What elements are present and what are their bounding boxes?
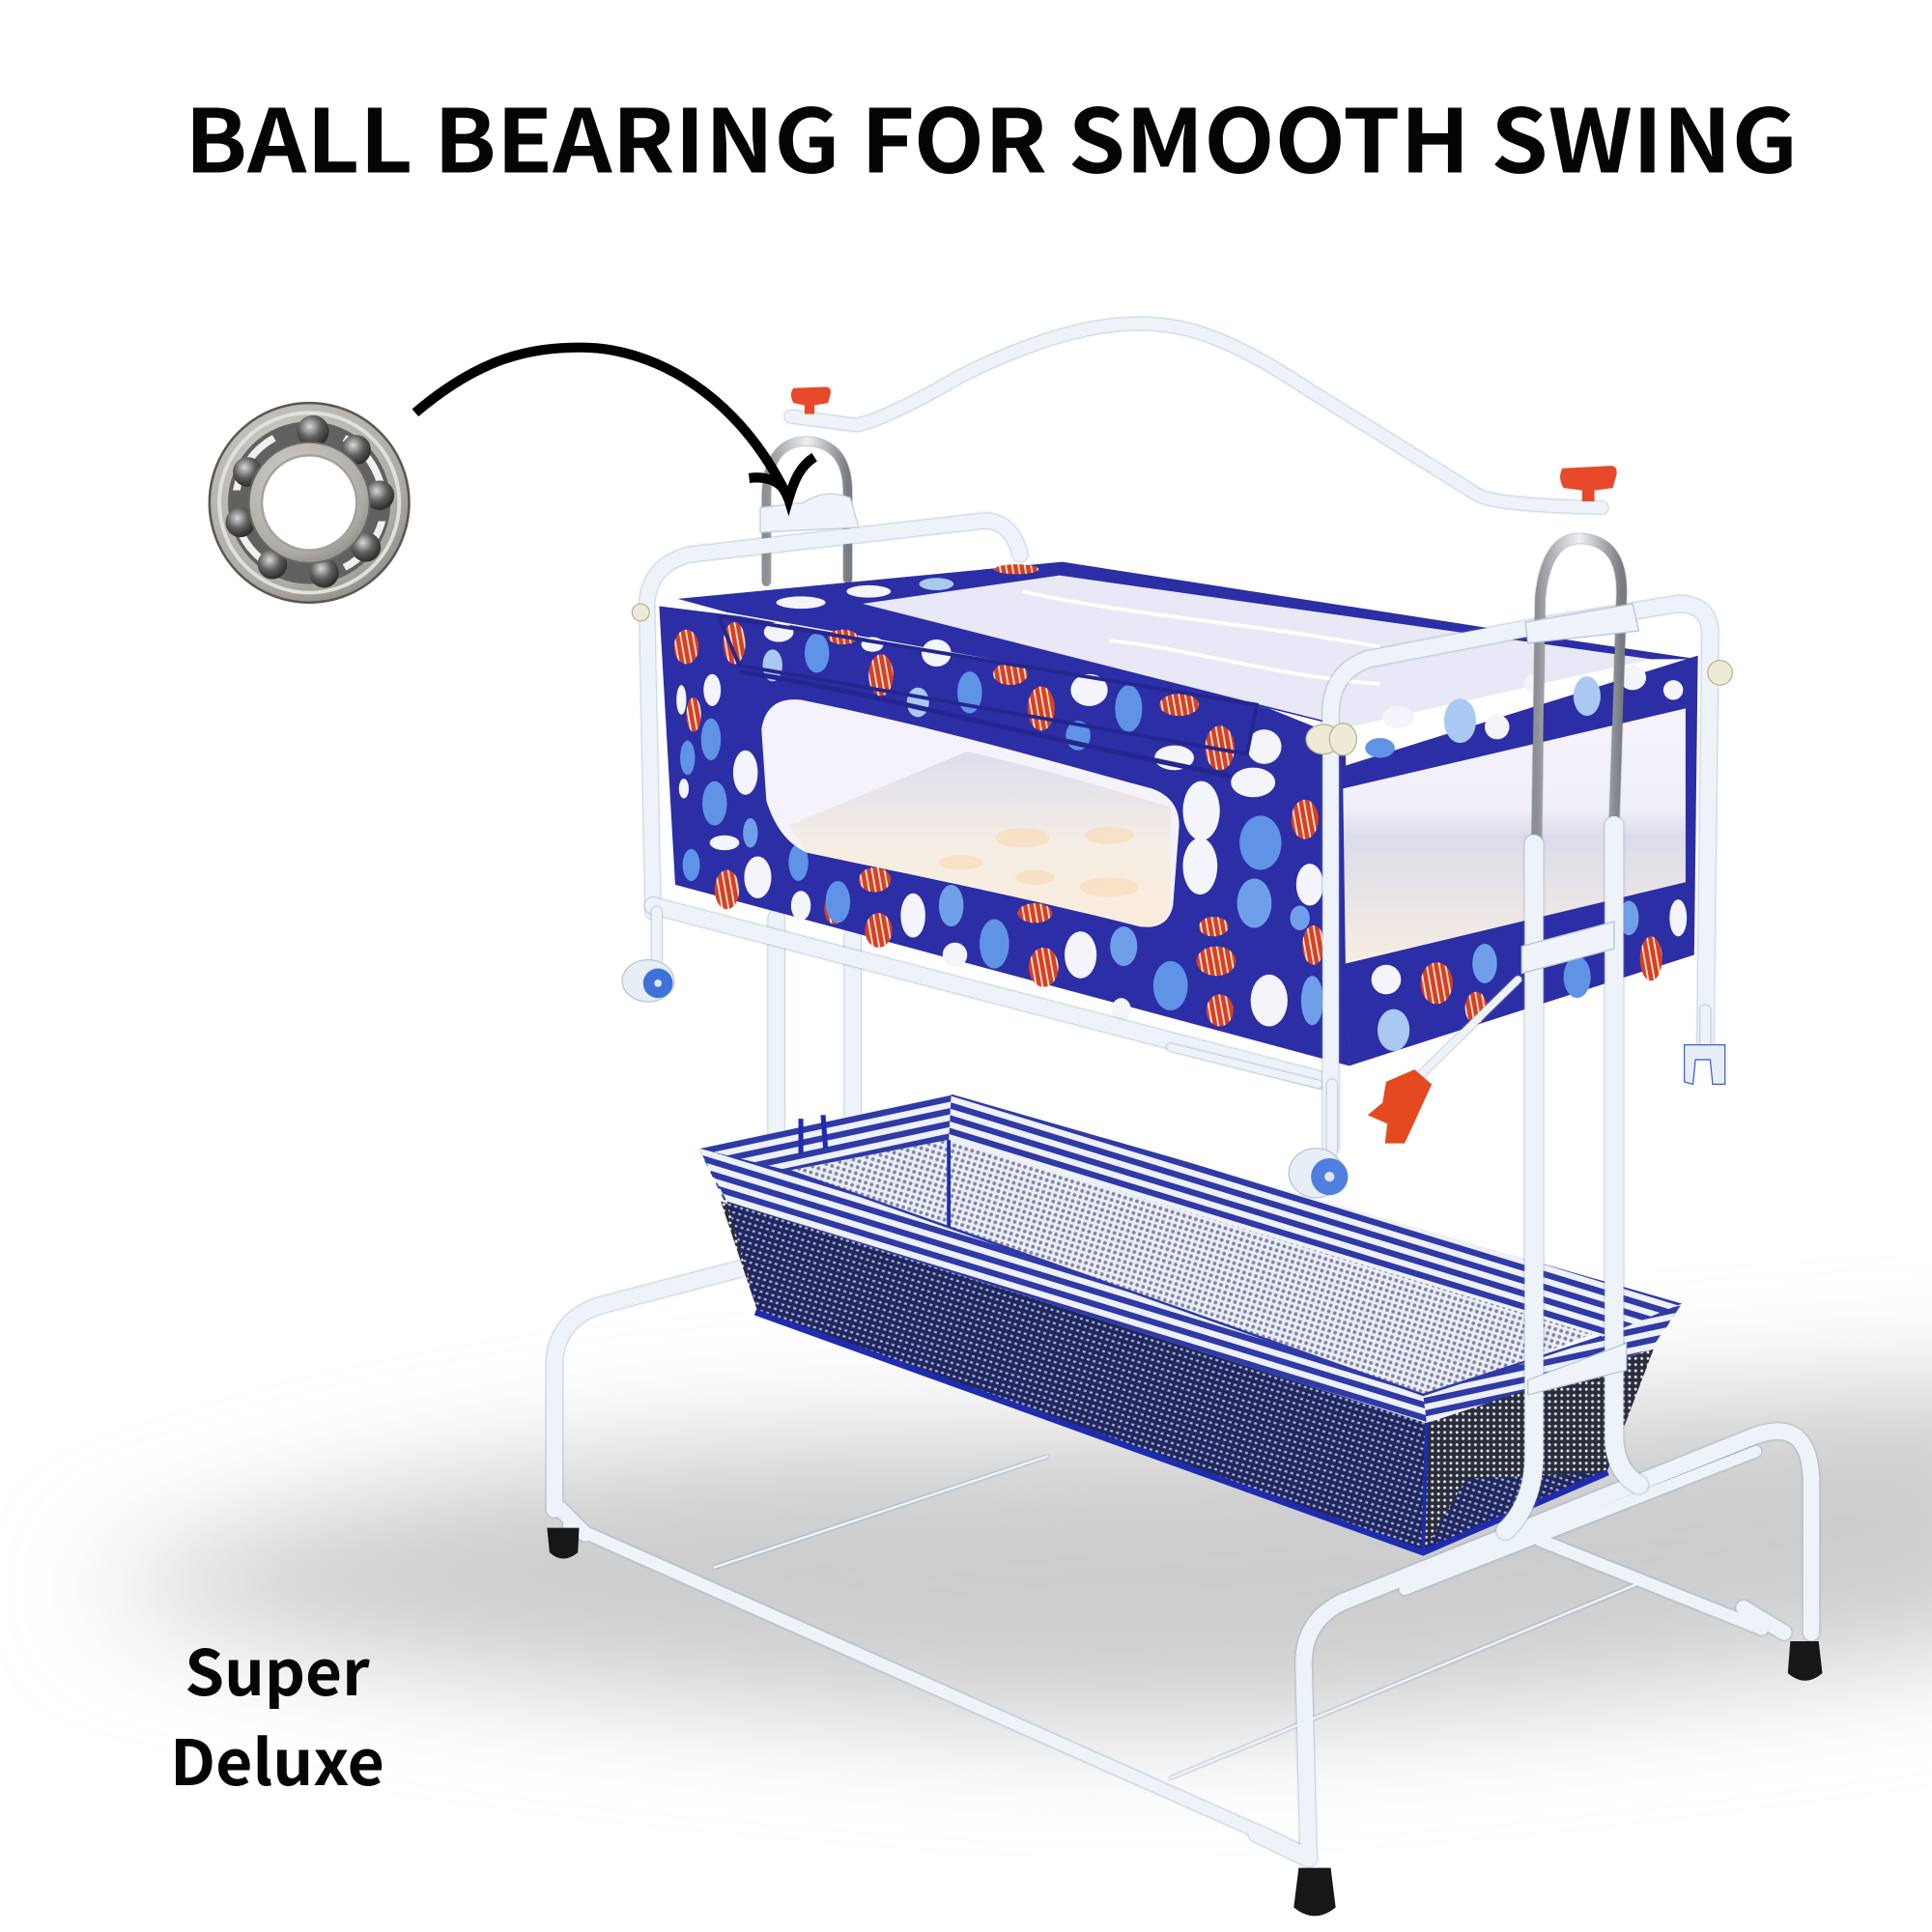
end caps	[632, 604, 1732, 755]
title: BALL BEARING FOR SMOOTH SWING	[185, 72, 1798, 199]
product label: Super	[185, 1623, 370, 1714]
product label	[170, 1623, 384, 1804]
rubber feet	[547, 1528, 1822, 1916]
post brackets	[1521, 604, 1638, 1395]
storage basket	[698, 1094, 1682, 1552]
left back posts	[777, 918, 853, 1140]
canopy arch	[791, 324, 1602, 508]
arrow	[415, 348, 814, 499]
product label: Deluxe	[170, 1713, 384, 1804]
crib front window	[761, 699, 1179, 927]
crib front frame	[653, 604, 1710, 1146]
crib front flap edge	[739, 671, 1233, 777]
basket left mesh	[721, 1140, 949, 1312]
basket back rim	[949, 1094, 1682, 1337]
crib	[659, 562, 1698, 1065]
crib side band apples	[1365, 666, 1687, 1051]
right chrome hanger	[1537, 538, 1622, 850]
hanger bracket	[760, 494, 859, 532]
basket bottom trim	[755, 1312, 1608, 1552]
base frame	[554, 1269, 1811, 1858]
crib top mesh	[678, 562, 1698, 727]
floor shadow	[86, 1380, 1932, 1726]
castor wheels	[622, 912, 1725, 1198]
crib top band apples	[674, 564, 1282, 770]
brake strut and latch	[1368, 980, 1518, 1144]
crib back rail and left chrome hanger	[647, 441, 1020, 912]
basket interior	[788, 1140, 1602, 1399]
crib side mesh	[1343, 708, 1686, 963]
crib right side fabric	[1343, 656, 1698, 1065]
basket front mesh	[727, 1202, 1427, 1552]
icon: ball bearing	[210, 403, 409, 603]
right posts	[1506, 826, 1638, 1530]
crib left column apples	[676, 674, 844, 924]
crib front fabric	[659, 607, 1350, 1065]
basket right mesh	[1423, 1350, 1654, 1552]
crib lower band apples	[826, 768, 1324, 1026]
canopy knobs	[791, 387, 1617, 501]
basket front rim	[698, 1149, 1427, 1423]
